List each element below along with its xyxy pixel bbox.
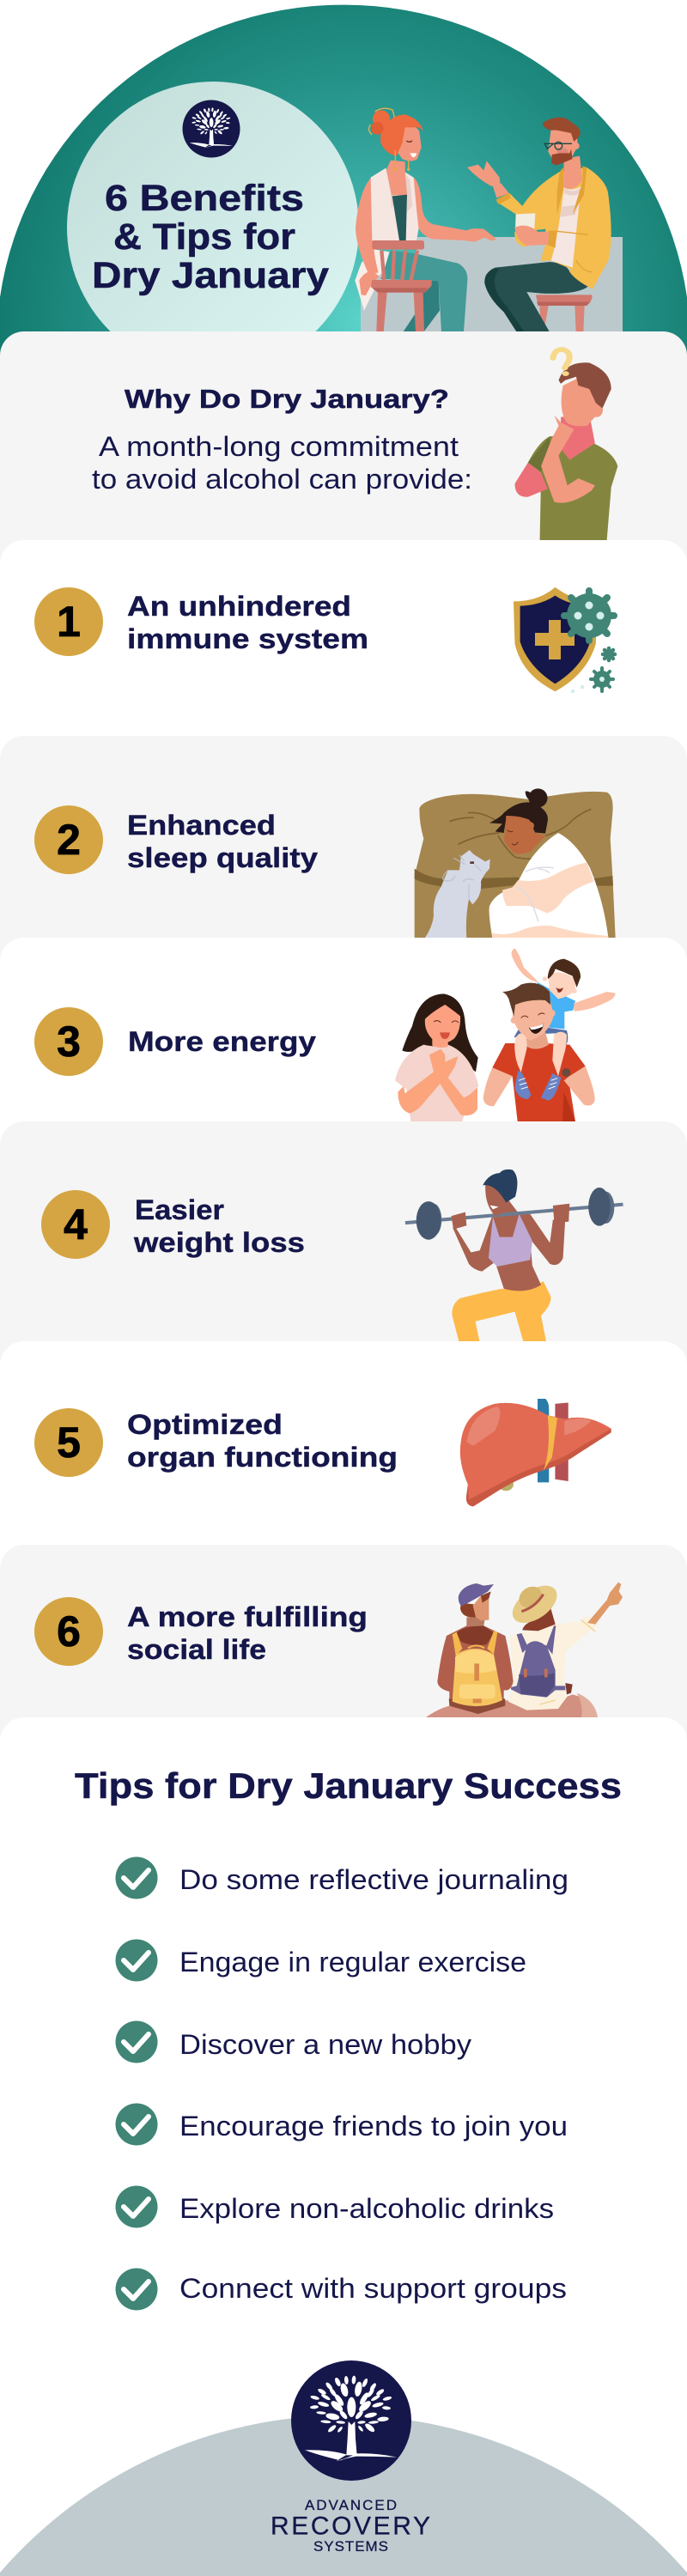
tip 4 <box>115 2104 568 2145</box>
title: & Tips for <box>113 216 295 258</box>
label 1: immune system <box>127 623 368 654</box>
label 4 <box>133 1194 305 1258</box>
label 5: organ functioning <box>127 1442 398 1473</box>
tip 4: Encourage friends to join you <box>179 2111 568 2142</box>
brand name: RECOVERY <box>271 2512 430 2540</box>
tip 5: Explore non-alcoholic drinks <box>179 2193 554 2224</box>
tip 5 <box>115 2186 554 2227</box>
brand name: SYSTEMS <box>313 2538 388 2555</box>
number badge 3: 3 <box>57 1018 81 1066</box>
tip 2: Engage in regular exercise <box>179 1947 526 1978</box>
label 4: weight loss <box>133 1227 305 1258</box>
panel: benefit 3 <box>0 938 687 1145</box>
panel: benefit 2 <box>0 736 687 962</box>
panel: benefit 5 <box>0 1341 687 1569</box>
footer logo <box>291 2360 411 2481</box>
panel: why dry january <box>0 331 687 564</box>
heading: tips: Tips for Dry January Success <box>75 1765 622 1806</box>
label 3: More energy <box>128 1026 316 1057</box>
label 2: Enhanced <box>127 810 276 841</box>
footer dome <box>0 2415 687 2576</box>
brand name: ADVANCED <box>305 2497 397 2513</box>
title disc <box>67 82 359 374</box>
icon: shield and virus <box>514 587 615 693</box>
title <box>92 178 329 296</box>
illustration: two hikers <box>425 1578 623 1718</box>
label 6 <box>127 1601 368 1665</box>
intro text: A month-long commitment <box>99 431 459 462</box>
illustration: thinking man <box>514 349 617 540</box>
number badge 3 <box>34 1007 103 1076</box>
intro text: to avoid alcohol can provide: <box>92 464 472 495</box>
label 6: social life <box>127 1634 266 1665</box>
label 5: Optimized <box>127 1409 283 1440</box>
panel: header dome <box>0 5 687 374</box>
label 1 <box>127 591 368 654</box>
number badge 2 <box>34 805 103 874</box>
title: Dry January <box>92 255 329 296</box>
tip 3: Discover a new hobby <box>179 2029 471 2060</box>
heading: why: Why Do Dry January? <box>125 384 449 414</box>
tip 3 <box>115 2021 471 2063</box>
illustration: woman lifting barbell <box>405 1170 623 1342</box>
label 5 <box>127 1409 398 1473</box>
panel: benefit 1 <box>0 540 687 760</box>
number badge 6: 6 <box>57 1607 81 1656</box>
label 2: sleep quality <box>127 842 318 873</box>
brand name <box>271 2497 430 2555</box>
panel: benefit 6 <box>0 1545 687 1741</box>
panel: benefit 4 <box>0 1121 687 1365</box>
number badge 6 <box>34 1597 103 1666</box>
illustration: sleeping person and cat <box>415 788 616 938</box>
number badge 1: 1 <box>57 598 81 646</box>
label 2 <box>127 810 318 873</box>
tip 6 <box>115 2269 567 2310</box>
label 6: A more fulfilling <box>127 1601 368 1632</box>
panel: tips <box>0 1717 687 2576</box>
illustration: liver <box>460 1399 611 1506</box>
number badge 4 <box>41 1190 110 1259</box>
number badge 4: 4 <box>64 1200 88 1249</box>
header logo <box>182 100 240 158</box>
label 1: An unhindered <box>127 591 351 622</box>
tip 6: Connect with support groups <box>179 2273 567 2304</box>
illustration: couple at table <box>355 108 623 332</box>
title: 6 Benefits <box>105 178 304 219</box>
illustration: happy family <box>395 948 616 1121</box>
intro text <box>92 431 472 495</box>
label 4: Easier <box>135 1194 224 1225</box>
tip 1: Do some reflective journaling <box>179 1864 568 1895</box>
number badge 1 <box>34 587 103 656</box>
tip 1 <box>115 1856 568 1899</box>
number badge 2: 2 <box>57 816 81 864</box>
number badge 5: 5 <box>57 1419 81 1467</box>
number badge 5 <box>34 1408 103 1477</box>
tip 2 <box>115 1939 526 1982</box>
